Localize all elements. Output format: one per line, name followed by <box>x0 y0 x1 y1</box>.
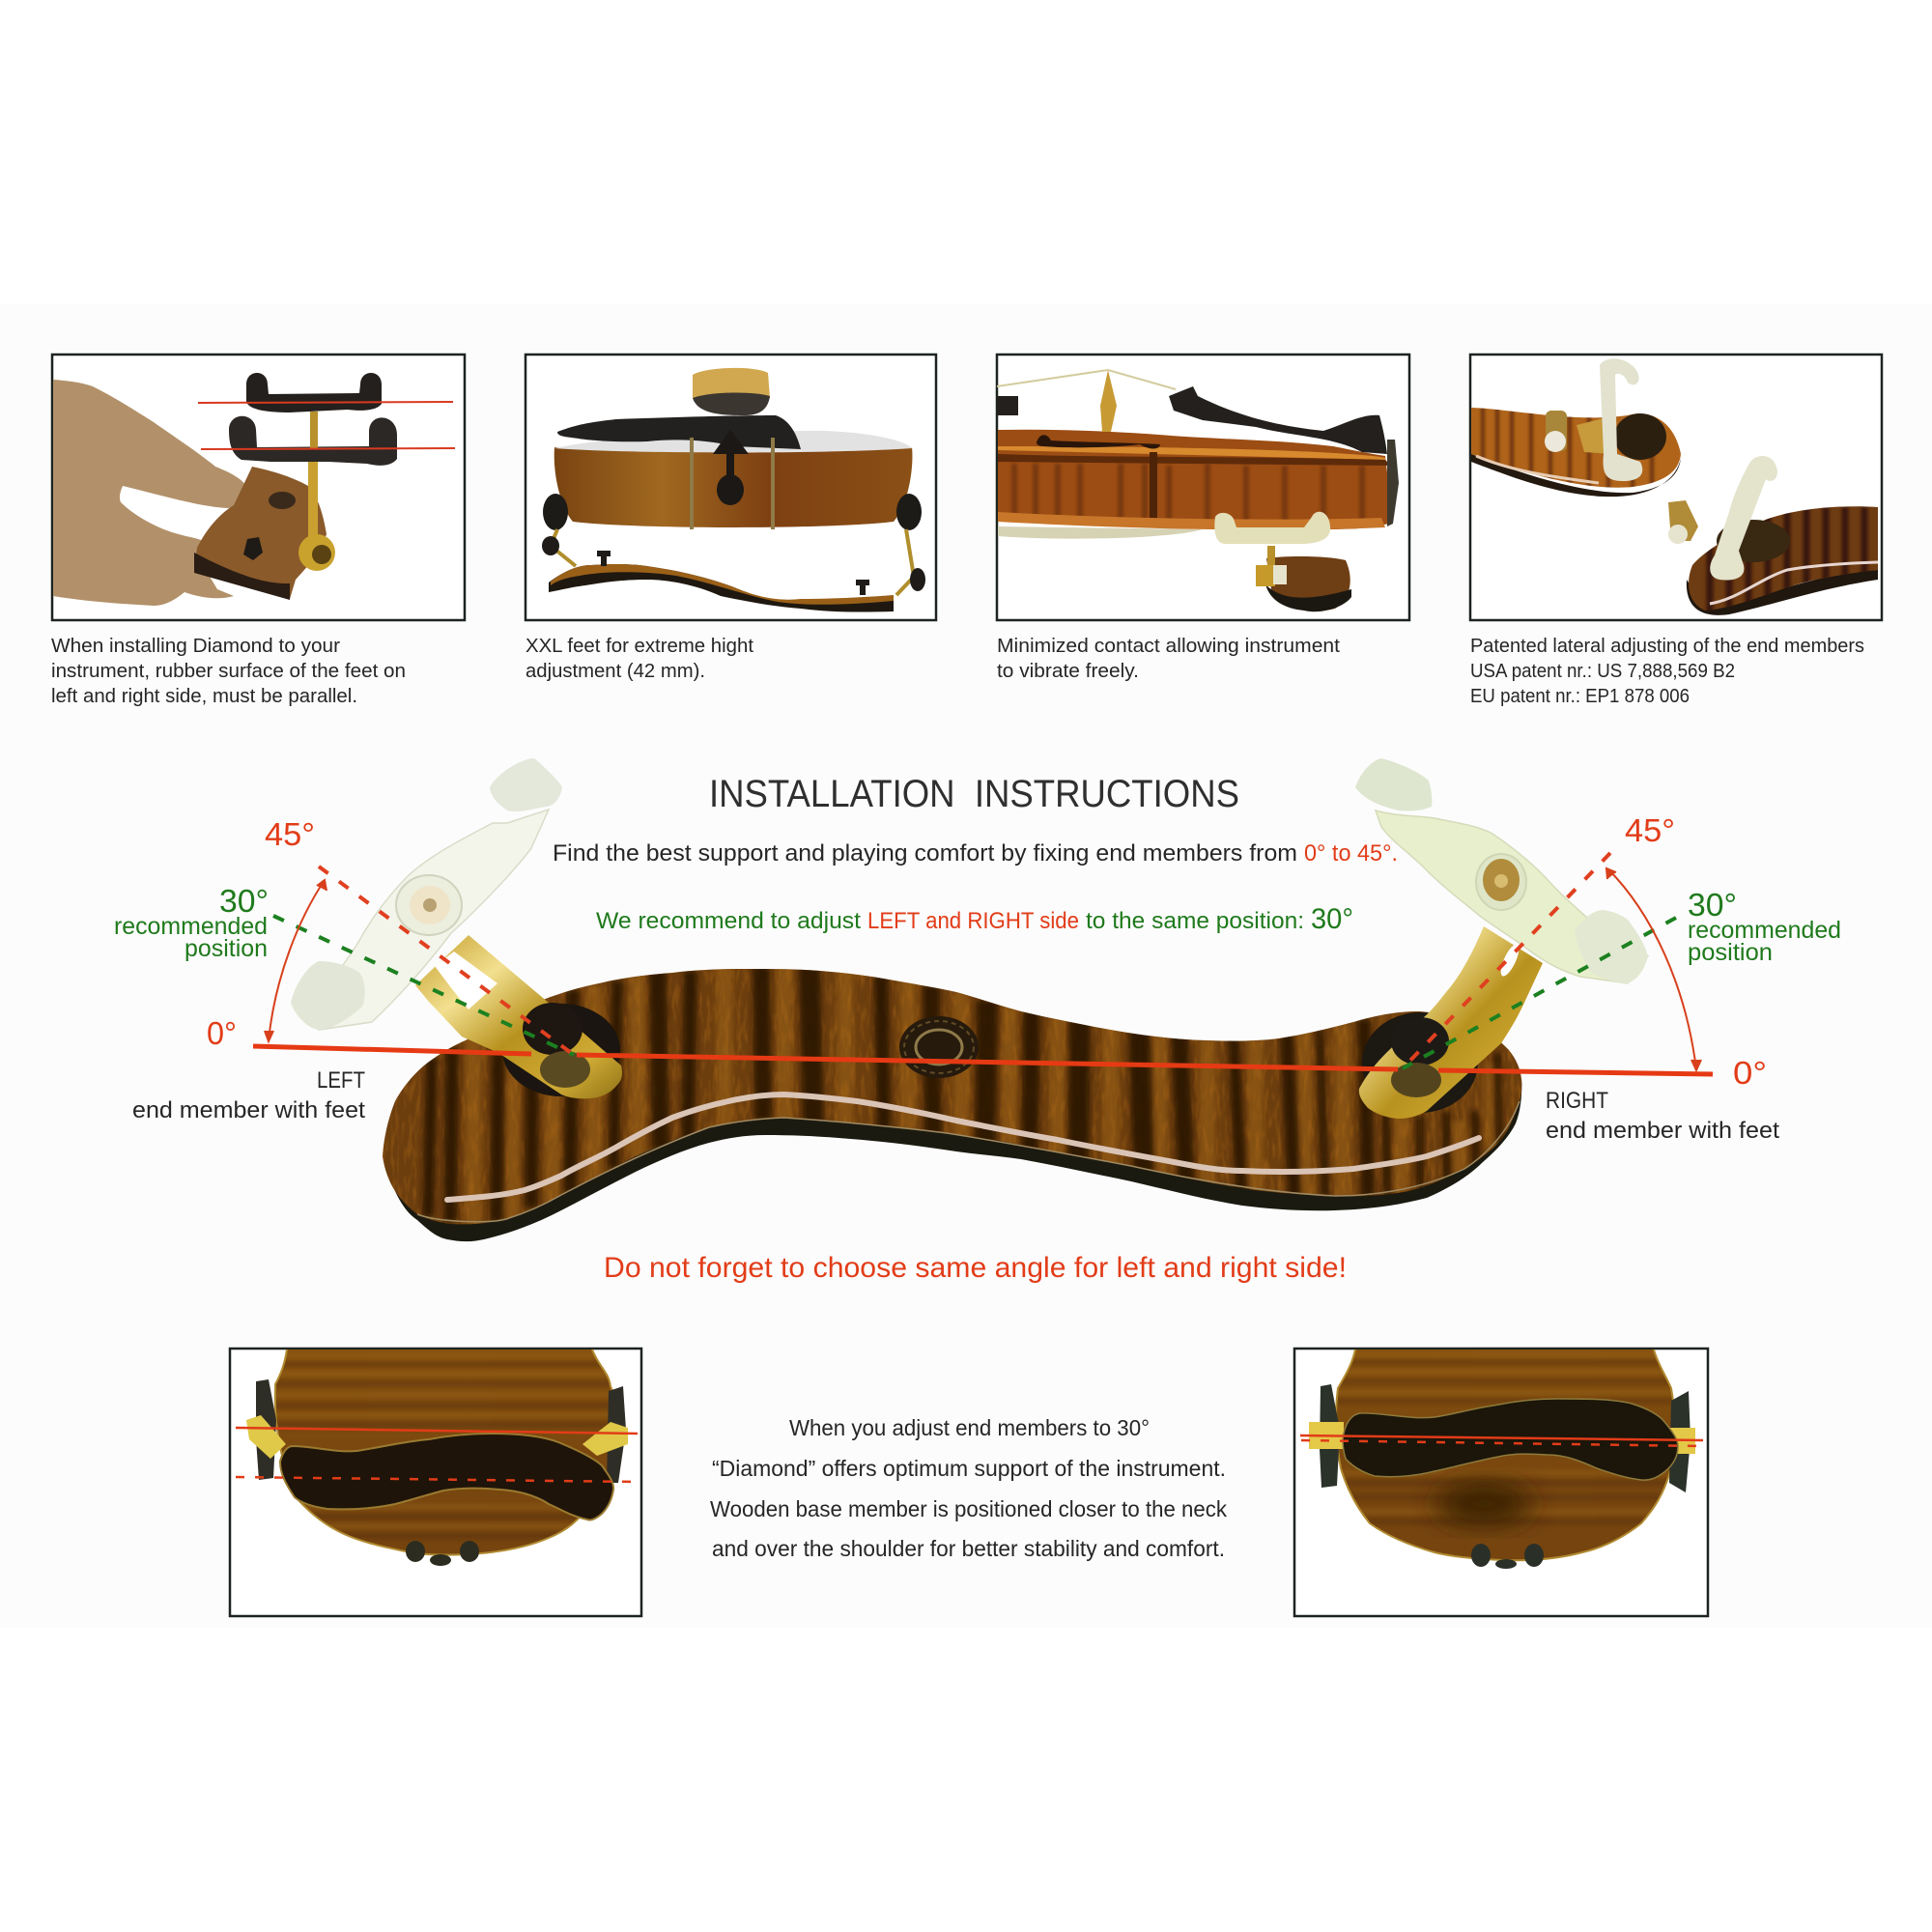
end buttons <box>1471 1544 1544 1569</box>
violin top <box>554 431 913 452</box>
arrow: right angle arc <box>1606 868 1701 1070</box>
icon: upper foot <box>246 373 382 412</box>
rest wood top <box>383 969 1522 1225</box>
caption 4: USA patent nr.: US 7,888,569 B2 <box>1470 661 1735 682</box>
panel: minimized contact <box>997 355 1409 620</box>
brass rods <box>551 529 914 595</box>
right bracket <box>582 1386 628 1483</box>
right angle labels: 45° <box>1625 812 1675 848</box>
caption 1: instrument, rubber surface of the feet on <box>51 661 406 682</box>
right angle labels <box>1546 812 1841 1144</box>
left angle labels: recommended <box>114 913 268 940</box>
lower clear foot <box>1710 456 1777 580</box>
rest outline <box>1343 1399 1678 1480</box>
arrow: left angle arc <box>265 880 327 1041</box>
caption 4: Patented lateral adjusting of the end members <box>1470 636 1864 657</box>
caption 4: EU patent nr.: EP1 878 006 <box>1470 686 1690 707</box>
left angle dashes <box>273 867 574 1055</box>
violin back <box>1333 1350 1681 1562</box>
caption 1: left and right side, must be parallel. <box>51 686 357 707</box>
reference lines <box>236 1428 638 1482</box>
tailpiece and bridge wood <box>693 368 770 415</box>
violin rim <box>1336 1350 1675 1560</box>
left gold plate <box>415 935 622 1098</box>
shadow under violin <box>998 526 1203 539</box>
clamp <box>1387 440 1399 526</box>
left knob <box>523 1003 590 1088</box>
left angle labels: LEFT <box>317 1067 365 1094</box>
wood bottom edge line <box>417 1101 1520 1222</box>
intro line: Find the best support and playing comfort by fixing end members from <box>553 840 1297 867</box>
chin rest <box>557 415 801 449</box>
left bracket <box>1309 1384 1344 1488</box>
rest dark base <box>386 1063 1521 1241</box>
shoulder rest <box>367 956 1536 1241</box>
left angle labels: end member with feet <box>132 1097 365 1123</box>
reference lines <box>1300 1435 1703 1446</box>
left clear end member <box>291 758 562 1030</box>
left black foot pad <box>502 1004 620 1096</box>
title: INSTALLATION INSTRUCTIONS <box>709 773 1239 815</box>
lacquer highlight <box>447 1094 1479 1200</box>
base underside <box>194 553 290 600</box>
violin body with stripes <box>998 430 1393 529</box>
background band <box>0 304 1932 1628</box>
body text <box>710 1415 1227 1561</box>
bridge and strings <box>997 370 1176 432</box>
violin back <box>270 1350 628 1557</box>
caption 3: Minimized contact allowing instrument <box>997 636 1340 657</box>
logo medallion <box>899 1016 979 1078</box>
clear foot <box>1214 512 1330 544</box>
violin rim <box>275 1350 621 1555</box>
right angle labels: RIGHT <box>1546 1088 1608 1114</box>
tailpiece and chin rest <box>997 386 1387 454</box>
caption 4 <box>1470 636 1864 707</box>
right angle labels: end member with feet <box>1546 1118 1779 1144</box>
caption 3: to vibrate freely. <box>997 661 1139 682</box>
right upper clear foot <box>1355 758 1432 811</box>
left angle labels: 30° <box>219 883 269 919</box>
body text: Wooden base member is positioned closer to the neck <box>710 1496 1227 1521</box>
wooden base in hand <box>194 467 327 599</box>
caption 1: When installing Diamond to your <box>51 636 340 657</box>
left upper clear foot <box>490 758 562 811</box>
recommendation line: We recommend to adjust <box>596 908 861 934</box>
end buttons <box>406 1541 479 1566</box>
lower rest <box>1668 500 1878 618</box>
recommendation line: 30° <box>1311 903 1353 935</box>
rest outline <box>280 1434 613 1520</box>
caption 2: XXL feet for extreme hight <box>526 636 753 657</box>
warning: Do not forget to choose same angle for left and right side! <box>604 1252 1347 1284</box>
left pivot washer <box>396 875 462 935</box>
icon: lower foot <box>229 416 397 466</box>
right knob <box>1391 1017 1449 1097</box>
parallel red lines <box>198 402 455 449</box>
panel: install parallel feet <box>52 355 465 620</box>
right black foot pad <box>1362 1012 1478 1113</box>
left angle labels <box>114 816 365 1123</box>
panel: lateral adjusting <box>1470 355 1882 620</box>
right angle labels: recommended <box>1688 917 1841 944</box>
panel: back view tilted <box>230 1349 641 1616</box>
right pivot screw <box>1476 854 1526 910</box>
recommendation line: to the same position: <box>1086 908 1304 934</box>
icon: hand <box>53 380 249 606</box>
f-hole <box>1037 435 1160 448</box>
panel: XXL feet <box>526 355 936 620</box>
left bracket <box>246 1379 286 1480</box>
left angle labels: 0° <box>207 1015 237 1051</box>
recommendation line <box>596 903 1353 935</box>
right lower clear foot <box>1575 910 1648 983</box>
body text: “Diamond” offers optimum support of the instrument. <box>712 1456 1226 1481</box>
feet on violin <box>543 494 922 530</box>
right angle dashes <box>1403 853 1676 1068</box>
left lower clear foot <box>291 961 365 1030</box>
upper rest <box>1471 406 1681 497</box>
intro line: 0° to 45°. <box>1304 840 1398 867</box>
right angle labels: 30° <box>1688 887 1737 923</box>
recommendation line: LEFT and RIGHT side <box>867 908 1079 934</box>
right bracket <box>1669 1391 1695 1492</box>
panel: back view level <box>1294 1349 1708 1616</box>
right gold plate <box>1359 926 1543 1119</box>
adjusting knobs <box>542 536 925 595</box>
right angle labels: 0° <box>1733 1055 1767 1091</box>
left angle labels: 45° <box>265 816 315 852</box>
caption 1 <box>51 636 406 707</box>
left angle labels: position <box>185 935 268 962</box>
caption 3 <box>997 636 1340 682</box>
violin body side <box>554 447 912 527</box>
caption 2 <box>526 636 753 682</box>
body text: and over the shoulder for better stability and comfort. <box>712 1536 1225 1561</box>
right clear end member <box>1355 758 1648 983</box>
upper clear foot <box>1600 358 1642 481</box>
body text: When you adjust end members to 30° <box>789 1415 1150 1440</box>
caption 2: adjustment (42 mm). <box>526 661 705 682</box>
clamps and button <box>690 430 775 529</box>
zero degree reference line <box>253 1046 1713 1074</box>
rest below violin <box>549 564 894 612</box>
right angle labels: position <box>1688 939 1773 966</box>
rest end and brass <box>1256 546 1351 611</box>
brass rod and knob <box>243 412 335 571</box>
